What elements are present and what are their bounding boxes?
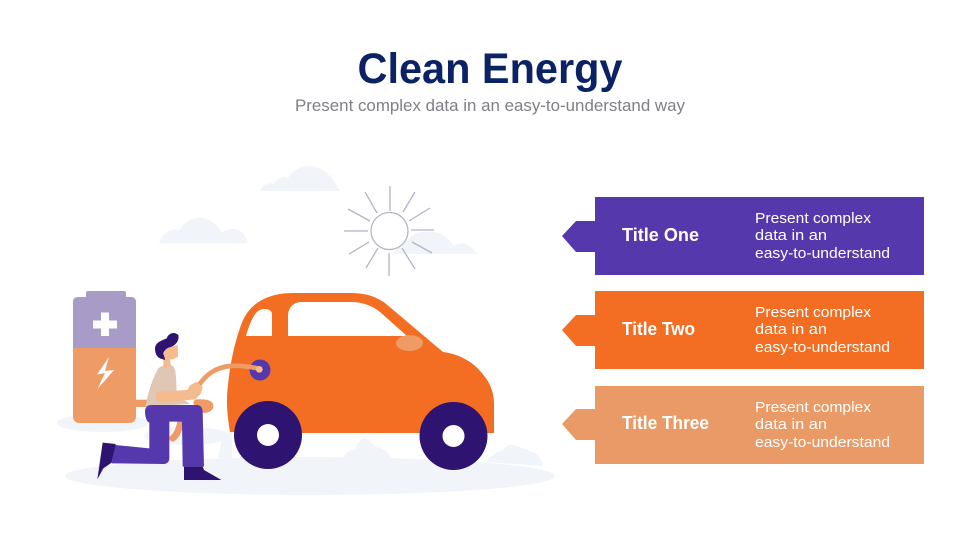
- text block: title one: data in an: [755, 227, 827, 244]
- charging hose: [198, 366, 259, 386]
- illustration: ground shadow: [57, 414, 555, 495]
- hair: [155, 333, 179, 360]
- text block: title one: Present complex: [755, 210, 872, 227]
- plug: [256, 366, 263, 373]
- icon: battery: [73, 291, 136, 423]
- text block: title two: Present complex: [755, 304, 872, 321]
- icon: sun: [344, 186, 434, 276]
- text block: title two: easy-to-understand: [755, 339, 890, 356]
- text block: title three: easy-to-understand: [755, 434, 890, 451]
- shirt: [146, 365, 190, 407]
- title: Clean Energy: [358, 45, 623, 93]
- text block: title two: data in an: [755, 321, 827, 338]
- heading: title one: Title One: [622, 225, 699, 245]
- trousers: [112, 405, 204, 467]
- panel: title one: [562, 197, 924, 275]
- neck and face: [163, 345, 178, 368]
- panel: title two: [562, 291, 924, 369]
- heading: title two: Title Two: [622, 319, 695, 339]
- text block: title three: data in an: [755, 416, 827, 433]
- text block: title three: Present complex: [755, 399, 872, 416]
- car: [227, 293, 494, 470]
- person and charging cable: [97, 333, 263, 480]
- subtitle: Present complex data in an easy-to-understand way: [295, 96, 685, 115]
- shoes: [97, 443, 116, 479]
- cable behind person: [136, 403, 210, 438]
- panel: title three: [562, 386, 924, 464]
- text block: title one: easy-to-understand: [755, 245, 890, 262]
- illustration: background clouds: [159, 166, 477, 254]
- arm and hand: [156, 382, 203, 403]
- heading: title three: Title Three: [622, 413, 709, 433]
